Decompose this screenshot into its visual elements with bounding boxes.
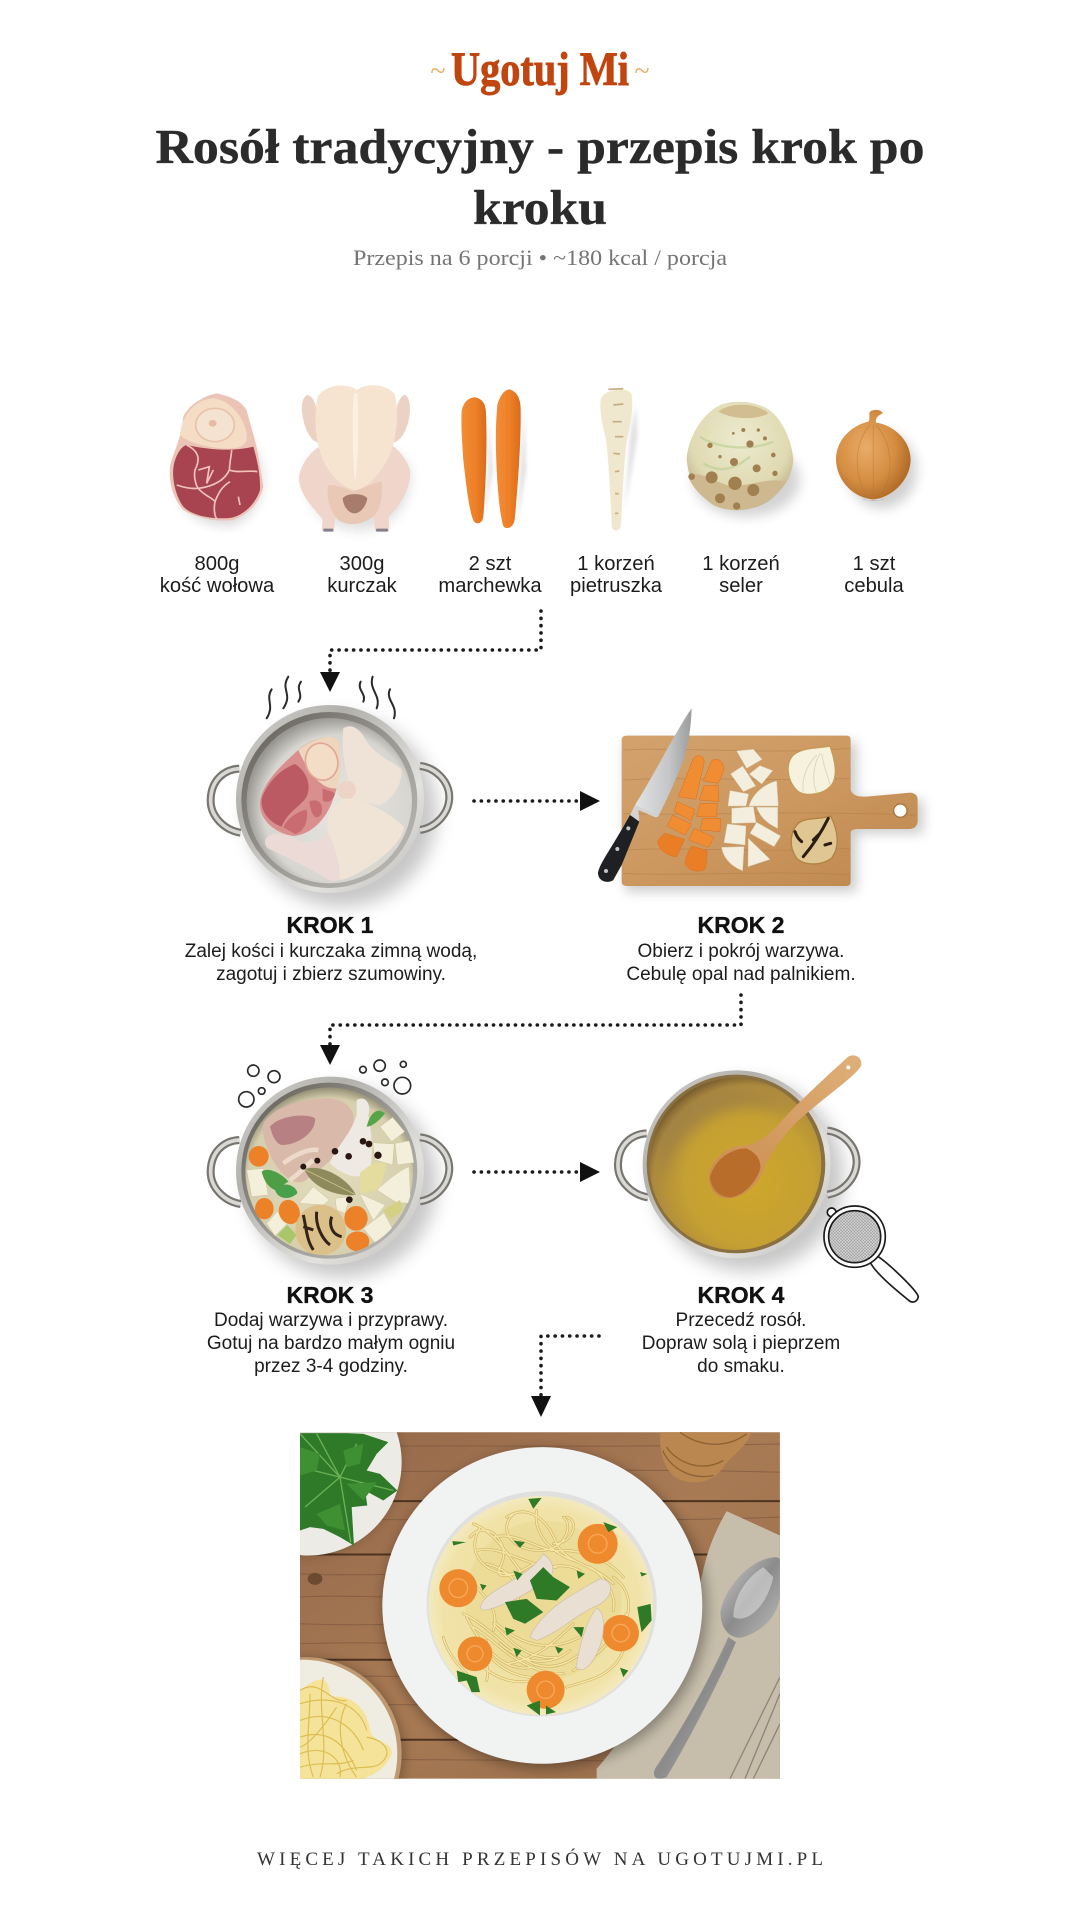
step 2 caption: KROK 2 <box>698 912 784 938</box>
ingredient labels: 1 szt <box>853 553 896 575</box>
step 1 caption: KROK 1 <box>287 912 374 938</box>
step 2 panel <box>598 708 923 985</box>
arrow: ingredients to step 1 <box>320 611 541 692</box>
icon: onion half <box>788 746 835 794</box>
arrow: step 2 to step 3 <box>320 995 741 1065</box>
napkin <box>597 1511 780 1779</box>
carrots <box>439 1524 639 1709</box>
footer: WIĘCEJ TAKICH PRZEPISÓW NA UGOTUJMI.PL <box>257 1848 823 1870</box>
step 4 caption: KROK 4 <box>698 1282 785 1308</box>
title <box>156 119 924 235</box>
subtitle: Przepis na 6 porcji • ~180 kcal / porcja <box>353 245 727 270</box>
arrow: step 1 to step 2 <box>474 791 600 811</box>
step 3 caption: przez 3-4 godziny. <box>254 1356 408 1377</box>
step 1 caption <box>185 912 477 985</box>
pot with vegetables <box>211 1077 449 1277</box>
icon: charred onion <box>791 816 837 864</box>
step 4 caption <box>642 1282 840 1377</box>
icon: steam <box>267 677 395 718</box>
ingredient labels: cebula <box>844 575 905 597</box>
step 3 caption: KROK 3 <box>287 1282 373 1308</box>
step 1 caption: Zalej kości i kurczaka zimną wodą, <box>185 941 477 962</box>
step 3 caption <box>207 1282 455 1377</box>
step 1 caption: zagotuj i zbierz szumowiny. <box>216 964 446 985</box>
icon: carrots <box>461 389 526 528</box>
icon: celery cubes <box>722 749 781 871</box>
icon: celeriac <box>687 402 800 517</box>
logo: Ugotuj Mi: Ugotuj Mi <box>451 43 629 96</box>
ingredient labels: marchewka <box>438 575 542 597</box>
ingredient labels: 2 szt <box>469 553 512 575</box>
step 2 caption: Cebulę opal nad palnikiem. <box>626 964 856 985</box>
icon: bubbles <box>239 1060 411 1107</box>
pepper mill <box>660 1432 752 1482</box>
ingredient labels <box>160 553 905 597</box>
step 4 caption: Przecedź rosół. <box>676 1310 806 1331</box>
step 3 panel <box>207 1060 455 1377</box>
icon: wooden spoon <box>709 1055 861 1198</box>
ingredient labels: 800g <box>195 553 239 575</box>
soup plate <box>382 1447 708 1769</box>
step 4 panel <box>618 1055 918 1377</box>
icon: parsley root <box>600 389 637 531</box>
arrow: step 3 to step 4 <box>474 1162 600 1182</box>
icon: beef bone <box>170 393 263 525</box>
icon: whole chicken <box>299 385 410 532</box>
arrow: step 4 to final dish <box>531 1336 599 1417</box>
pot with broth <box>618 1070 857 1271</box>
ingredient labels: 300g <box>340 553 384 575</box>
logo: Ugotuj Mi: ~ <box>430 56 446 87</box>
photo: finished soup <box>300 1432 780 1779</box>
step 4 caption: Dopraw solą i pieprzem <box>642 1333 840 1354</box>
wooden table <box>300 1432 780 1779</box>
step 4 caption: do smaku. <box>697 1356 785 1377</box>
step 1 panel <box>185 677 477 985</box>
noodles <box>443 1510 629 1687</box>
step 2 caption <box>626 912 856 985</box>
logo: Ugotuj Mi: ~ <box>634 56 650 87</box>
ingredient labels: 1 korzeń <box>577 553 655 575</box>
panel: ingredients <box>160 385 917 597</box>
icon: strainer <box>824 1206 918 1302</box>
noodle plate <box>300 1653 409 1779</box>
title: kroku <box>473 180 607 235</box>
title: Rosół tradycyjny - przepis krok po <box>156 119 924 174</box>
ingredient labels: seler <box>719 575 763 597</box>
spoon <box>654 1557 780 1779</box>
chicken strips <box>480 1554 611 1670</box>
pot with meat <box>211 705 449 907</box>
icon: knife <box>598 708 692 882</box>
ingredient labels: kość wołowa <box>160 575 275 597</box>
step 2 caption: Obierz i pokrój warzywa. <box>638 941 844 962</box>
ingredient labels: pietruszka <box>570 575 663 597</box>
icon: carrot pieces <box>658 756 724 871</box>
icon: cutting board <box>622 736 923 892</box>
ingredient labels: kurczak <box>327 575 398 597</box>
ingredient labels: 1 korzeń <box>702 553 780 575</box>
step 3 caption: Gotuj na bardzo małym ogniu <box>207 1333 455 1354</box>
parsley plate <box>300 1432 404 1559</box>
step 3 caption: Dodaj warzywa i przyprawy. <box>214 1310 448 1331</box>
parsley garnish <box>452 1498 652 1715</box>
icon: onion <box>836 410 917 508</box>
